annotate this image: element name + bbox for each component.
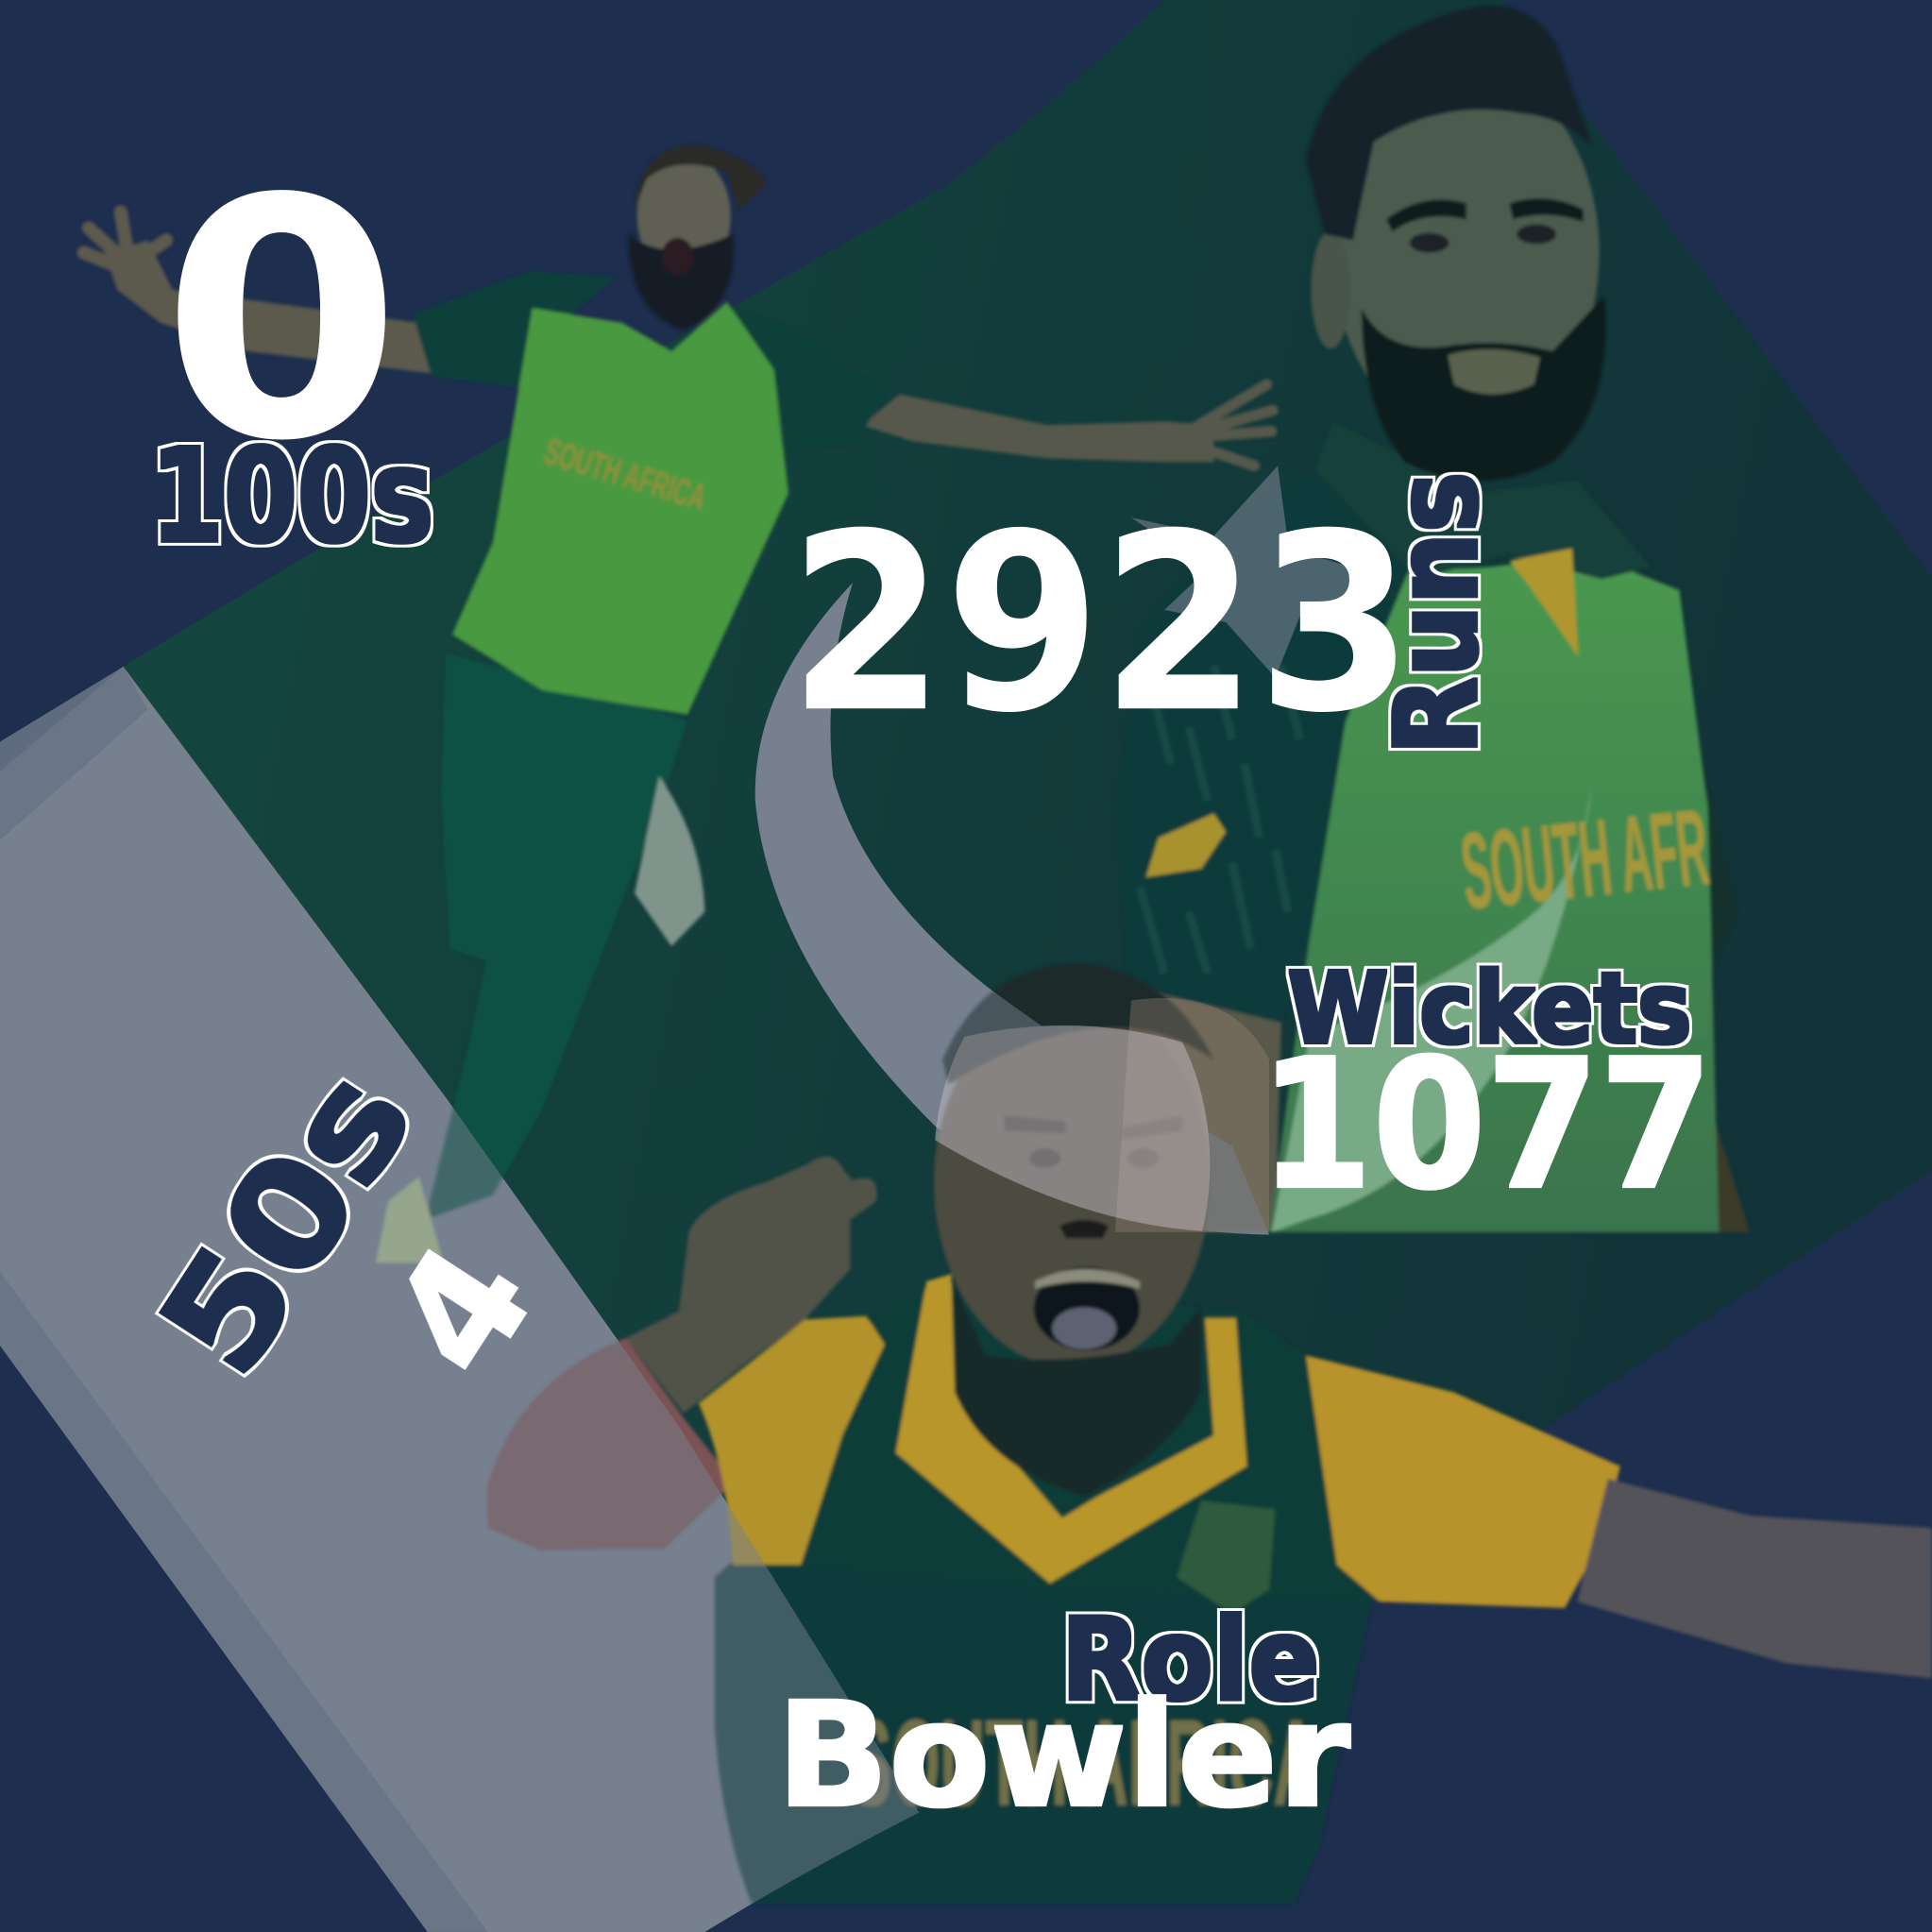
stat: runs: 2923 — [788, 482, 1414, 767]
flag: white band — [0, 667, 919, 1932]
player: bowler celebrating — [84, 145, 1273, 1263]
player: bowler celebrating: SOUTH AFRICA — [540, 432, 711, 518]
player: close-up celebrating: SOUTH AFRICA — [850, 1694, 1318, 1832]
stat: role — [776, 1595, 1350, 1840]
player: portrait standing — [1119, 6, 1750, 1232]
stat: wickets: Wickets — [1288, 951, 1692, 1066]
stat: fifties: 50s — [128, 1041, 446, 1403]
stat: hundreds: 100s — [150, 422, 433, 572]
flag: crescent — [755, 583, 1269, 1234]
overlay: portrait arm over face — [1115, 998, 1269, 1232]
player: close-up celebrating — [486, 963, 1932, 1904]
overlay: band, crescent and star tint — [0, 466, 1392, 1932]
stat: hundreds: 0 — [161, 129, 401, 514]
stat: wickets — [1260, 951, 1713, 1229]
stat: fifties — [128, 1041, 570, 1406]
stat: runs: Runs — [1372, 472, 1503, 755]
stat: role: Role — [1060, 1595, 1319, 1726]
stat: role: Bowler — [776, 1672, 1350, 1840]
stat: wickets: 1077 — [1260, 1021, 1713, 1229]
stat: fifties: 4 — [357, 1214, 570, 1406]
